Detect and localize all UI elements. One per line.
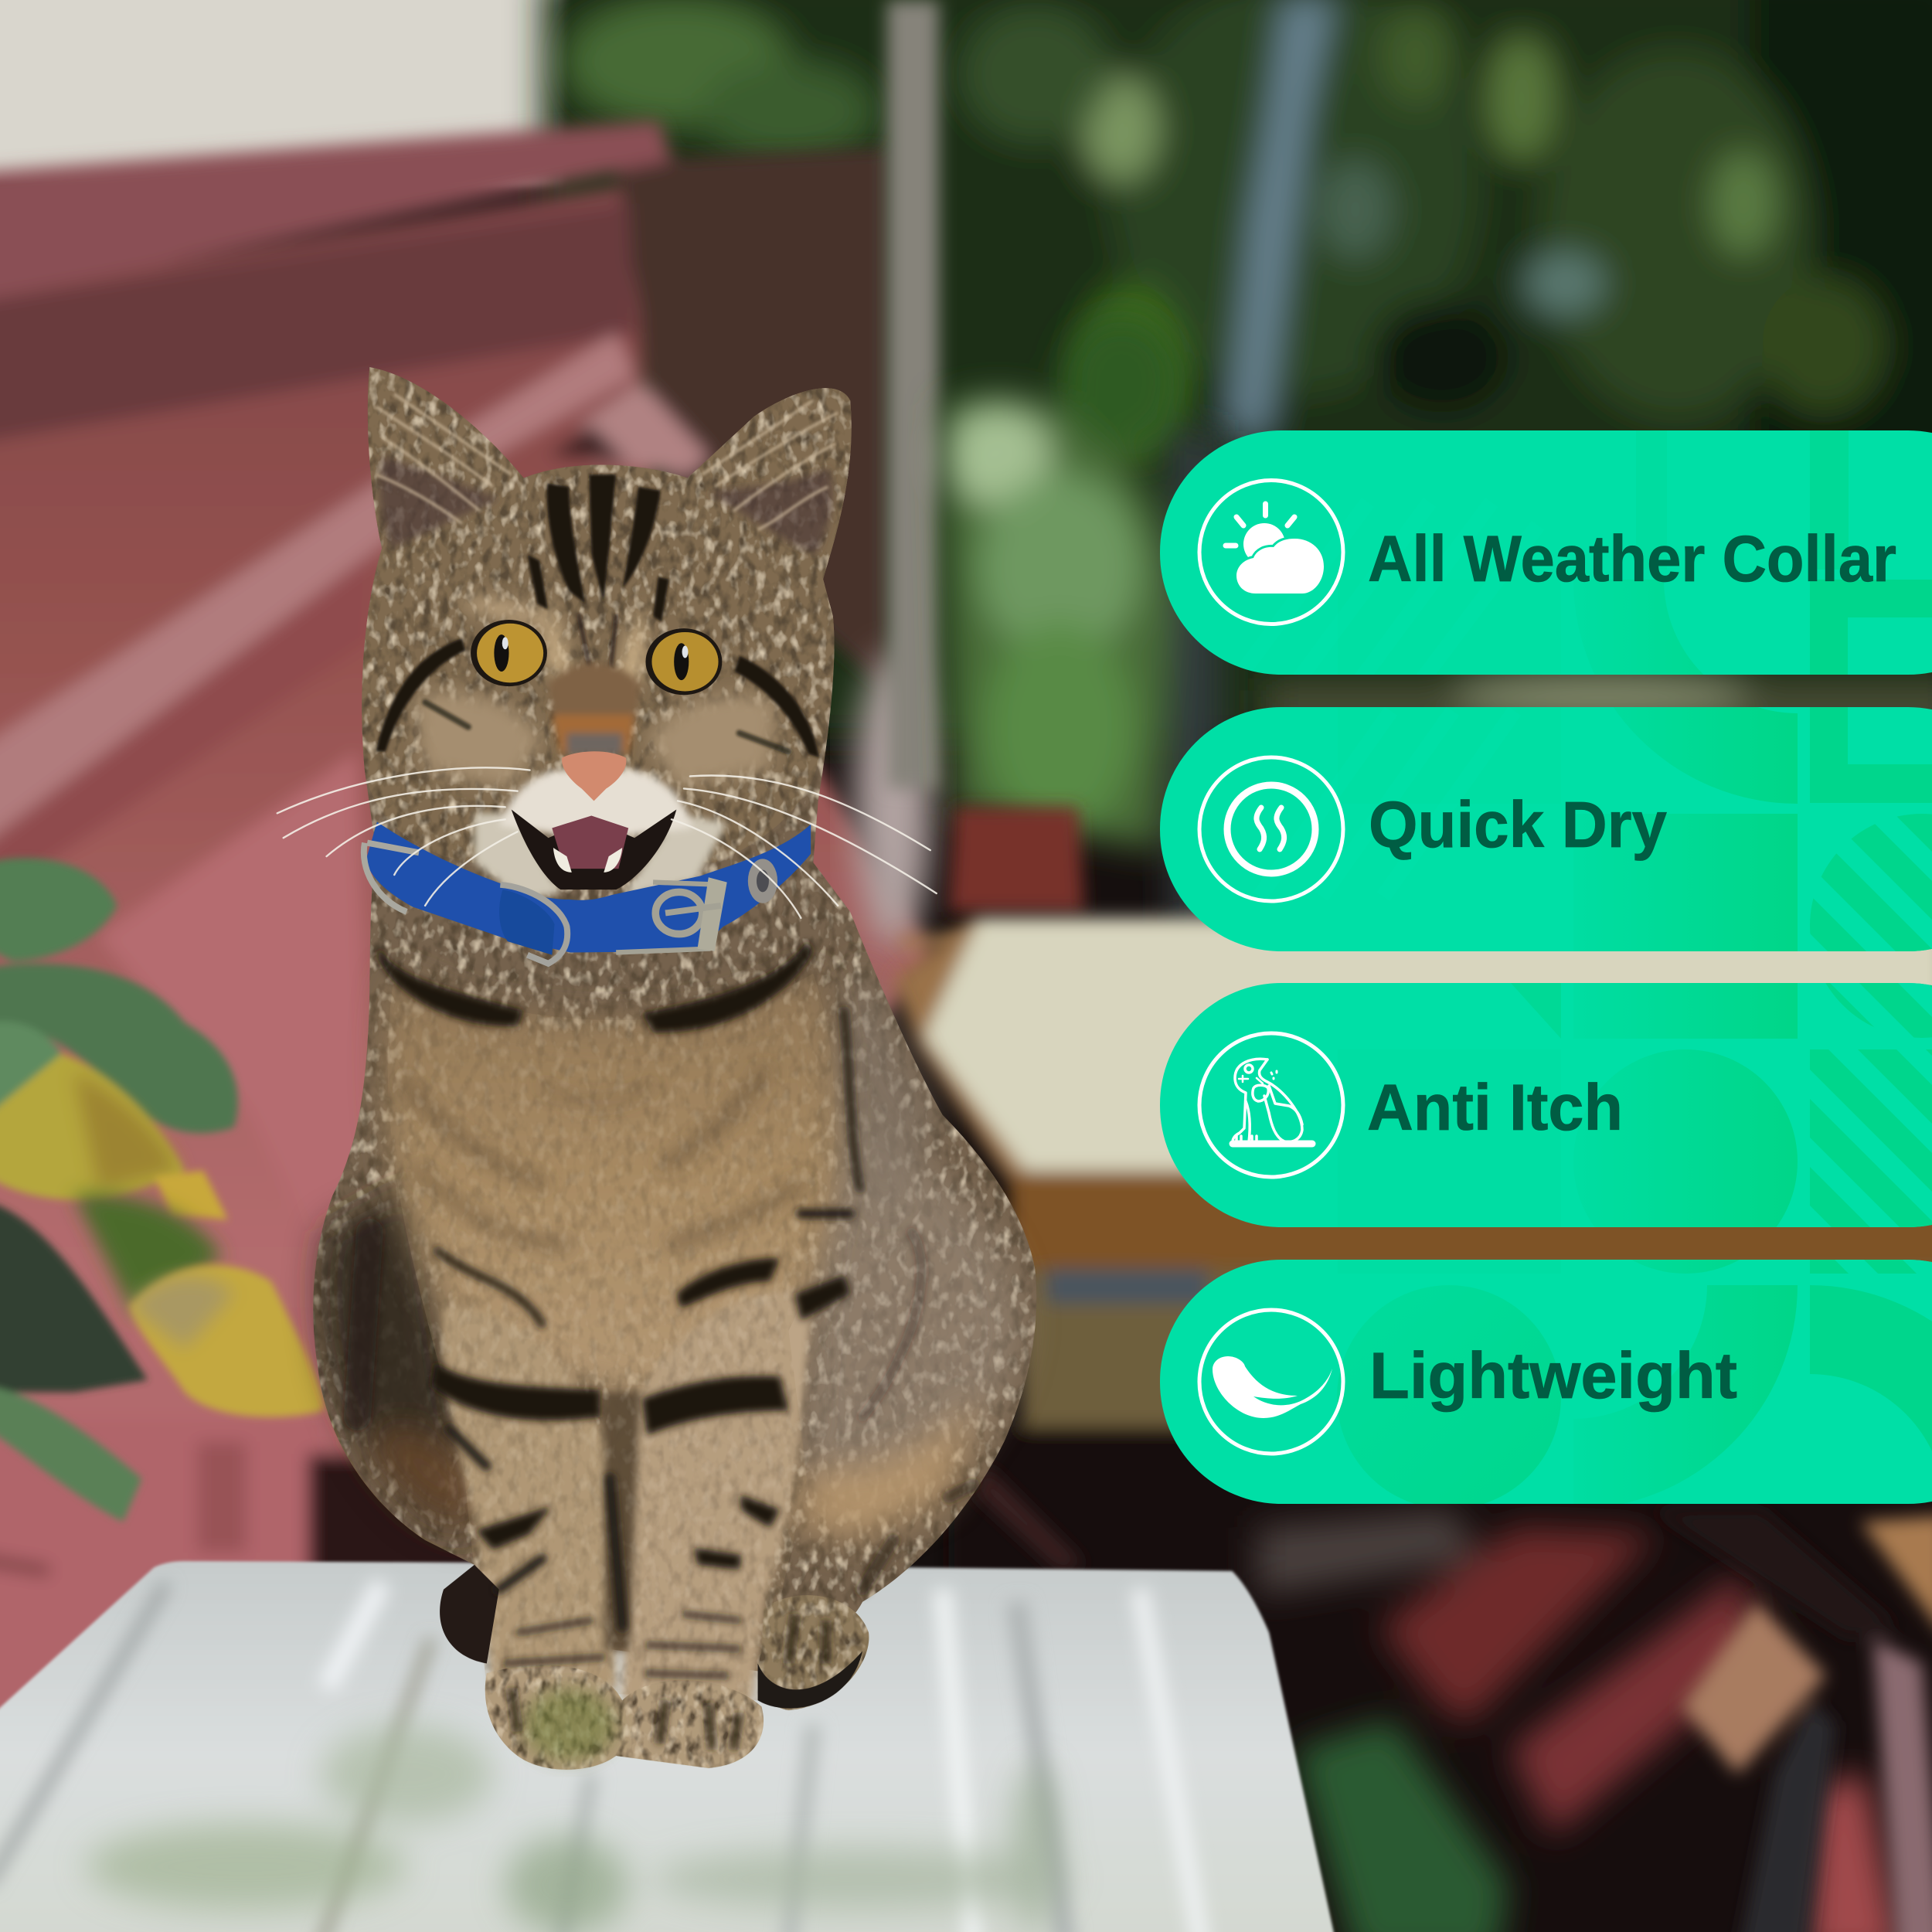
cat back haunch and rear body: [313, 367, 1036, 1675]
badge: All Weather Collar: [1199, 481, 1896, 624]
icon: cat scratching: [1199, 1033, 1343, 1177]
top left pale wall: [0, 0, 566, 185]
cheeks and brows: [413, 591, 776, 788]
badge: Lightweight: [1199, 1310, 1737, 1454]
badge: Anti Itch: [1199, 1033, 1623, 1177]
nose bridge: [549, 663, 641, 754]
icon: feather: [1199, 1310, 1343, 1454]
cat front legs: [442, 1291, 813, 1700]
cat flanks shading: [321, 961, 1022, 1540]
plastic box top: [0, 1561, 1337, 1932]
cat body stripes: [377, 940, 850, 1570]
left plant leaves: [0, 858, 323, 1522]
eyes: [471, 620, 722, 695]
pale blurred shape right of cat: [854, 653, 933, 949]
cat texture overlay: [388, 974, 835, 1700]
icon: sun behind cloud: [1199, 481, 1343, 624]
badge: Quick Dry: [1199, 757, 1667, 901]
muzzle and chin fur: [474, 769, 727, 900]
mouth: [512, 810, 676, 889]
ear hairs: [376, 394, 838, 530]
cat head: [362, 367, 852, 900]
label: All Weather Collar: [1368, 522, 1896, 595]
icon: steam in circle: [1199, 757, 1343, 901]
label: Quick Dry: [1369, 788, 1667, 861]
cat photo subject: [277, 367, 1036, 1770]
green foliage upper right: [543, 0, 1932, 740]
face markings: [376, 474, 819, 758]
nose: [562, 751, 626, 801]
post and middle plants: [887, 0, 1515, 949]
ears inner: [379, 456, 833, 554]
blue collar: [364, 821, 811, 964]
left wall: [0, 121, 937, 1737]
table and lower background: [893, 918, 1932, 1932]
badge background pattern: [1144, 417, 1932, 1515]
feature badges panel: [1144, 417, 1932, 1515]
label: Anti Itch: [1367, 1071, 1623, 1144]
whiskers: [277, 767, 937, 918]
cat paws: [440, 1565, 869, 1770]
cat chest mottling: [406, 1072, 801, 1244]
label: Lightweight: [1369, 1339, 1737, 1412]
cat chest fur: [388, 974, 835, 1393]
